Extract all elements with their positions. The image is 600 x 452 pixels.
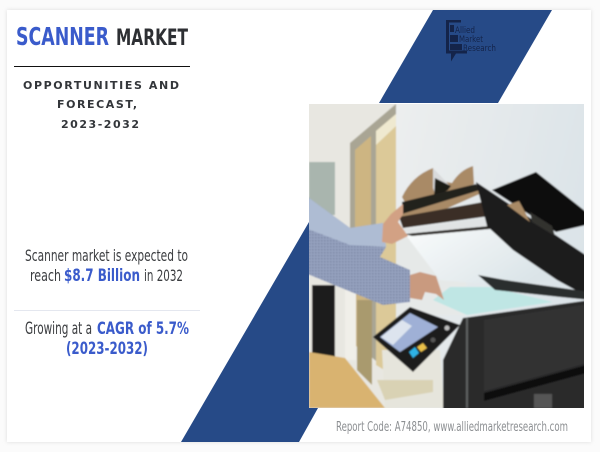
CAGR statement: (2023-2032) <box>66 339 148 359</box>
office background <box>300 100 590 412</box>
market size statement: Scanner market is expected to <box>25 246 188 265</box>
photo: person using office scanner <box>300 100 590 412</box>
subtitle <box>23 79 179 131</box>
scanner glass <box>433 287 553 315</box>
control panel <box>373 307 460 372</box>
market size statement: in 2032 <box>144 266 183 285</box>
CAGR statement <box>25 319 189 359</box>
upper hand <box>382 204 408 244</box>
subtitle: FORECAST, <box>57 98 137 111</box>
logo: Allied Market Research: Research <box>463 44 496 54</box>
document feeder <box>399 166 493 236</box>
title: MARKET <box>116 25 188 51</box>
lower hand <box>410 272 444 300</box>
subtitle: 2023-2032 <box>61 118 139 131</box>
market size statement <box>25 246 188 286</box>
CAGR statement: Growing at a <box>25 319 92 339</box>
scanner lid <box>476 172 590 298</box>
logo: Allied Market Research <box>446 20 496 62</box>
title: SCANNER <box>16 22 109 51</box>
scanner body <box>443 300 590 412</box>
scanner lid underside <box>408 230 497 278</box>
top blue parallelogram <box>379 10 552 103</box>
logo: Allied Market Research: Allied <box>455 26 475 36</box>
arm and shirt sleeve <box>305 195 410 305</box>
subtitle: OPPORTUNITIES AND <box>23 79 179 92</box>
market size statement: reach <box>30 266 61 285</box>
CAGR statement: CAGR of 5.7% <box>97 319 189 339</box>
bottom blue shape <box>181 222 318 442</box>
market size statement: $8.7 Billion <box>64 266 140 286</box>
logo: Allied Market Research: Market <box>459 35 483 45</box>
scanner hinges <box>478 275 590 300</box>
